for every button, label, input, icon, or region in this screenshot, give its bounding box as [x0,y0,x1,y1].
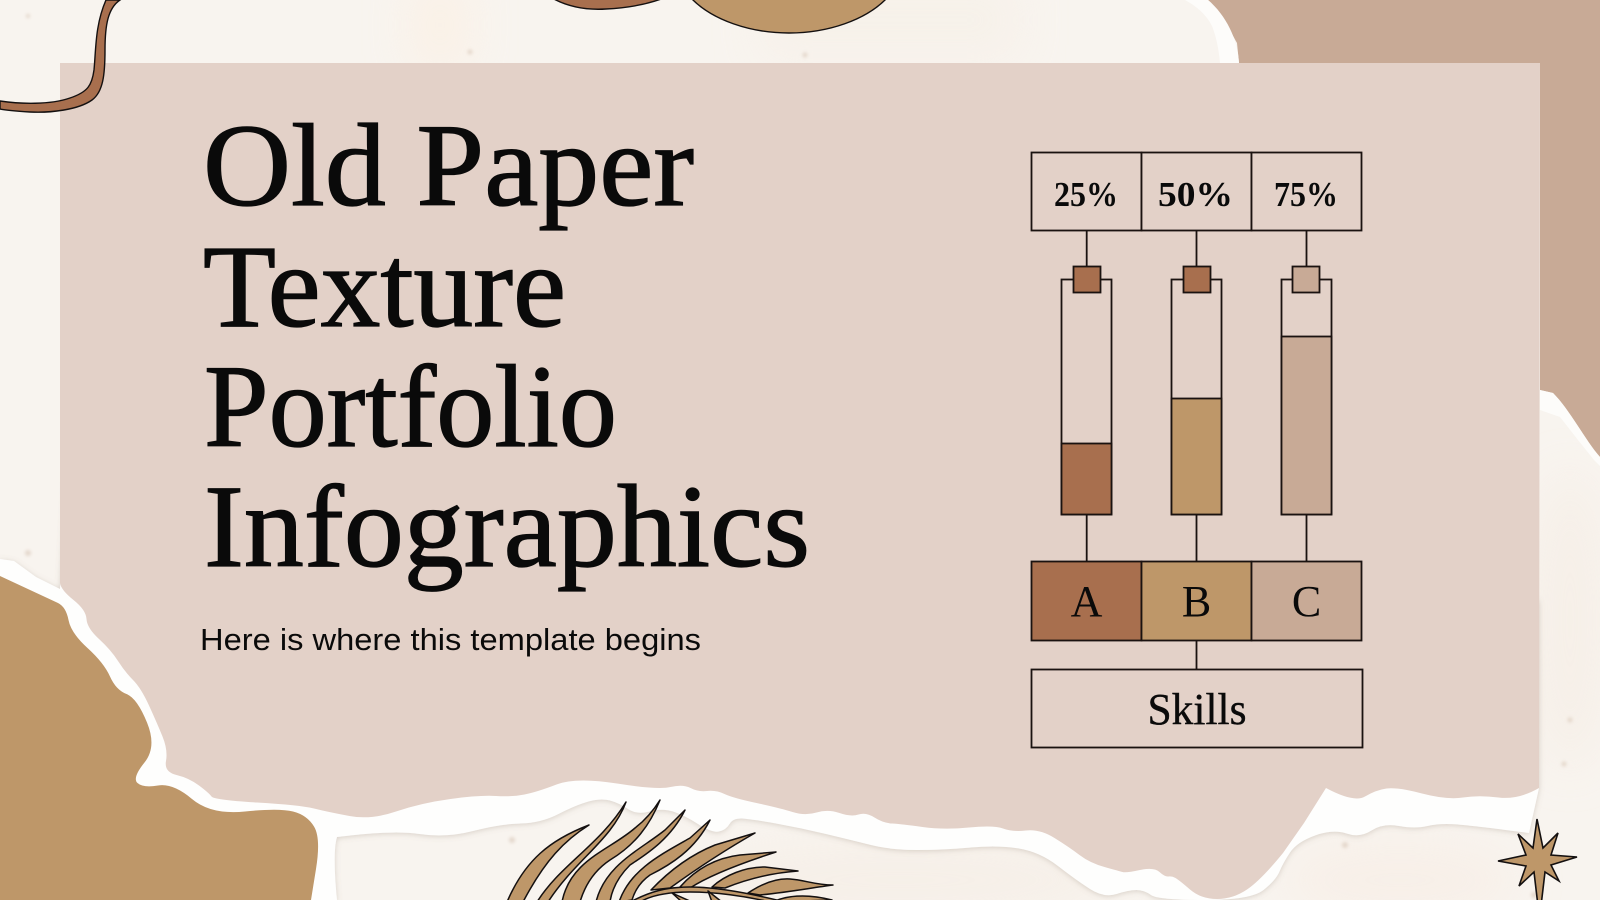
torn white edge top right [1185,0,1239,63]
category row: C [1292,577,1321,626]
torn white edge right [1540,390,1600,466]
title: Infographics [204,461,810,592]
category row [1032,562,1362,640]
panel: tan paper bottom left [0,576,318,900]
percent row: 50% [1158,175,1233,214]
skills label box: Skills [1148,685,1246,734]
bar C 75% [1282,266,1332,514]
connector lines [1087,230,1306,669]
percent row: 25% [1054,175,1118,214]
title: Portfolio [204,341,617,472]
chart: skills progress [1032,152,1362,748]
title: Old Paper [203,100,694,231]
bar A 25% [1062,266,1112,514]
category row: B [1182,577,1211,626]
icon: star [1498,819,1577,900]
bar B 50% [1172,266,1222,514]
icon: palm leaf [507,800,833,900]
torn white paper band [0,400,1539,900]
percent row [1032,152,1362,230]
blob: brown top [552,0,664,9]
skills label box [1032,670,1362,748]
percent row: 75% [1274,175,1338,214]
squiggle: brown line top left [0,0,120,112]
title: Texture [203,221,566,352]
category row: A [1071,577,1103,626]
title [203,100,810,592]
panel: rose paper top right [1208,0,1600,457]
subtitle: Here is where this template begins [200,622,701,657]
blob: tan circle top [691,0,887,33]
